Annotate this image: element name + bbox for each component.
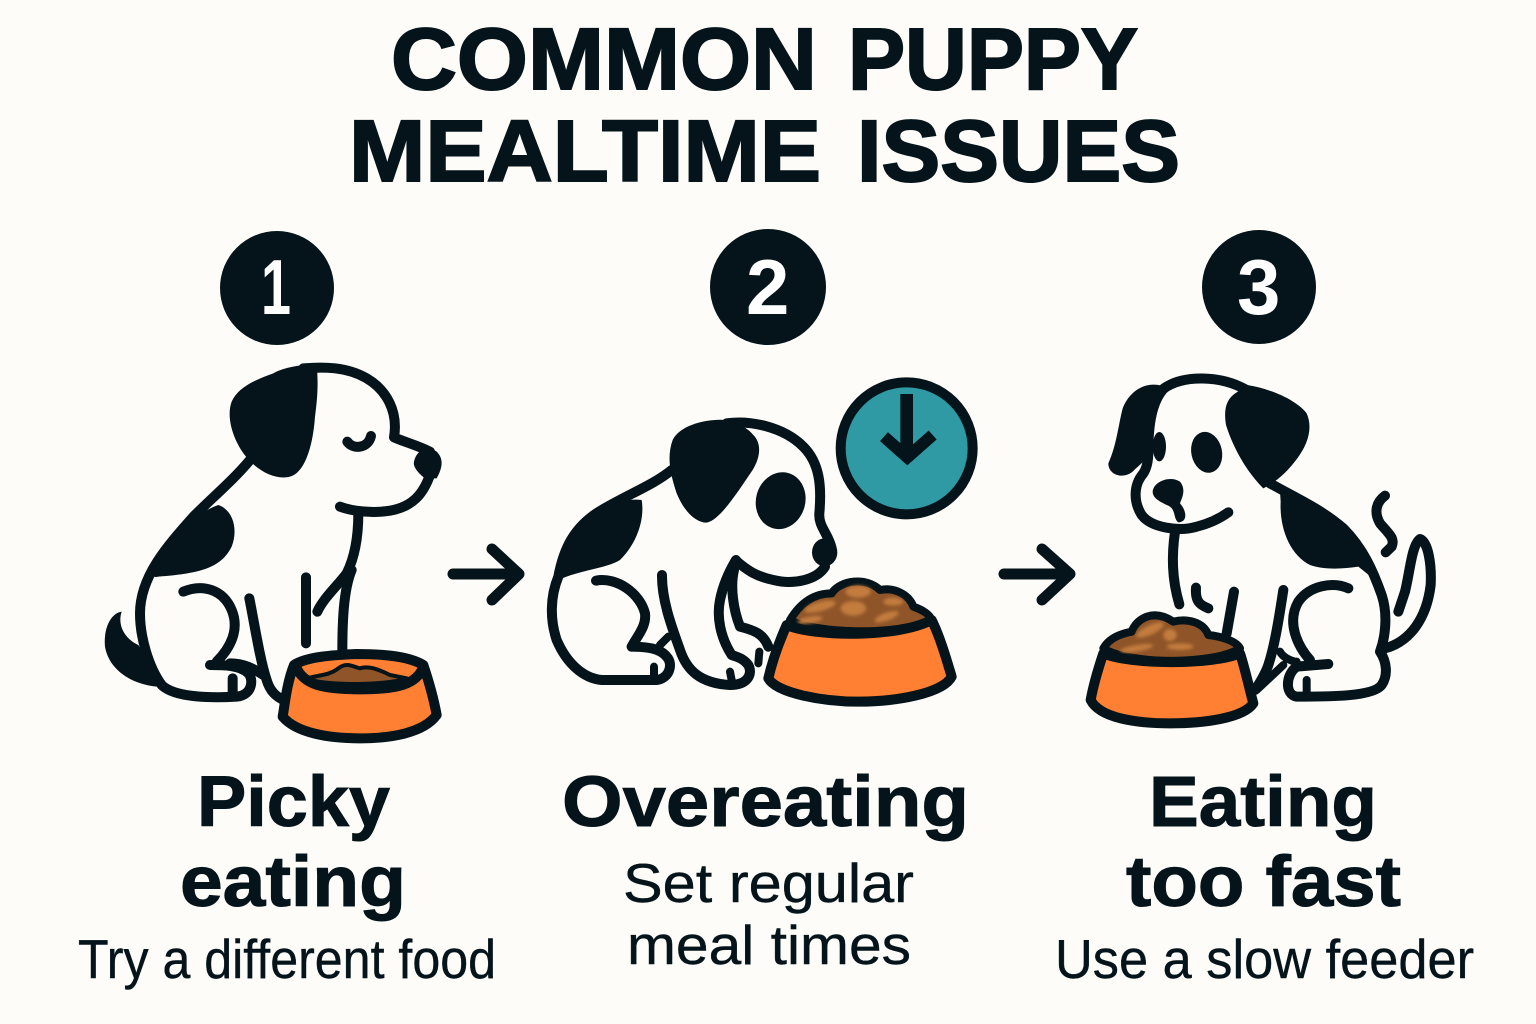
- panel text: picky eating: eating: [180, 843, 406, 922]
- panel text: picky eating: Picky: [197, 763, 391, 842]
- step number 2 badge: 2: [746, 243, 789, 331]
- orange bowl with food: [1091, 615, 1253, 723]
- title: PUPPY: [848, 11, 1138, 108]
- panel text: overeating: [562, 763, 969, 976]
- step number 1 badge: [220, 231, 334, 345]
- panel text: picky eating: Try a different food: [78, 928, 496, 990]
- panel text: overeating: meal times: [627, 914, 911, 976]
- panel text: eating too fast: Eating: [1149, 763, 1377, 842]
- arrow from step 1 to step 2: [453, 549, 519, 600]
- arrow from step 2 to step 3: [1004, 549, 1070, 600]
- icon: teal clock badge with down arrow: [841, 382, 973, 514]
- step number 2 badge: [710, 229, 826, 345]
- illustration: fast-eating puppy with wagging tail: [1091, 379, 1431, 723]
- panel text: eating too fast: too fast: [1126, 843, 1401, 922]
- title: [349, 11, 1180, 200]
- illustration: picky puppy turning away from bowl: [105, 364, 442, 738]
- title: COMMON: [391, 11, 817, 108]
- panel text: overeating: Overeating: [562, 763, 969, 842]
- step number 3 badge: 3: [1237, 243, 1280, 331]
- step number 3 badge: [1202, 230, 1316, 344]
- motion squiggle by tail: [1376, 496, 1393, 552]
- orange bowl with a little food: [283, 654, 437, 738]
- title: ISSUES: [857, 103, 1180, 200]
- panel text: picky eating: [78, 763, 496, 990]
- panel text: eating too fast: [1055, 763, 1474, 990]
- step number 1 badge: 1: [261, 243, 291, 331]
- title: MEALTIME: [349, 103, 821, 200]
- orange bowl heaped with food: [768, 582, 952, 702]
- illustration: overeating puppy at full bowl: [552, 382, 973, 702]
- panel text: overeating: Set regular: [623, 852, 914, 914]
- panel text: eating too fast: Use a slow feeder: [1055, 928, 1474, 990]
